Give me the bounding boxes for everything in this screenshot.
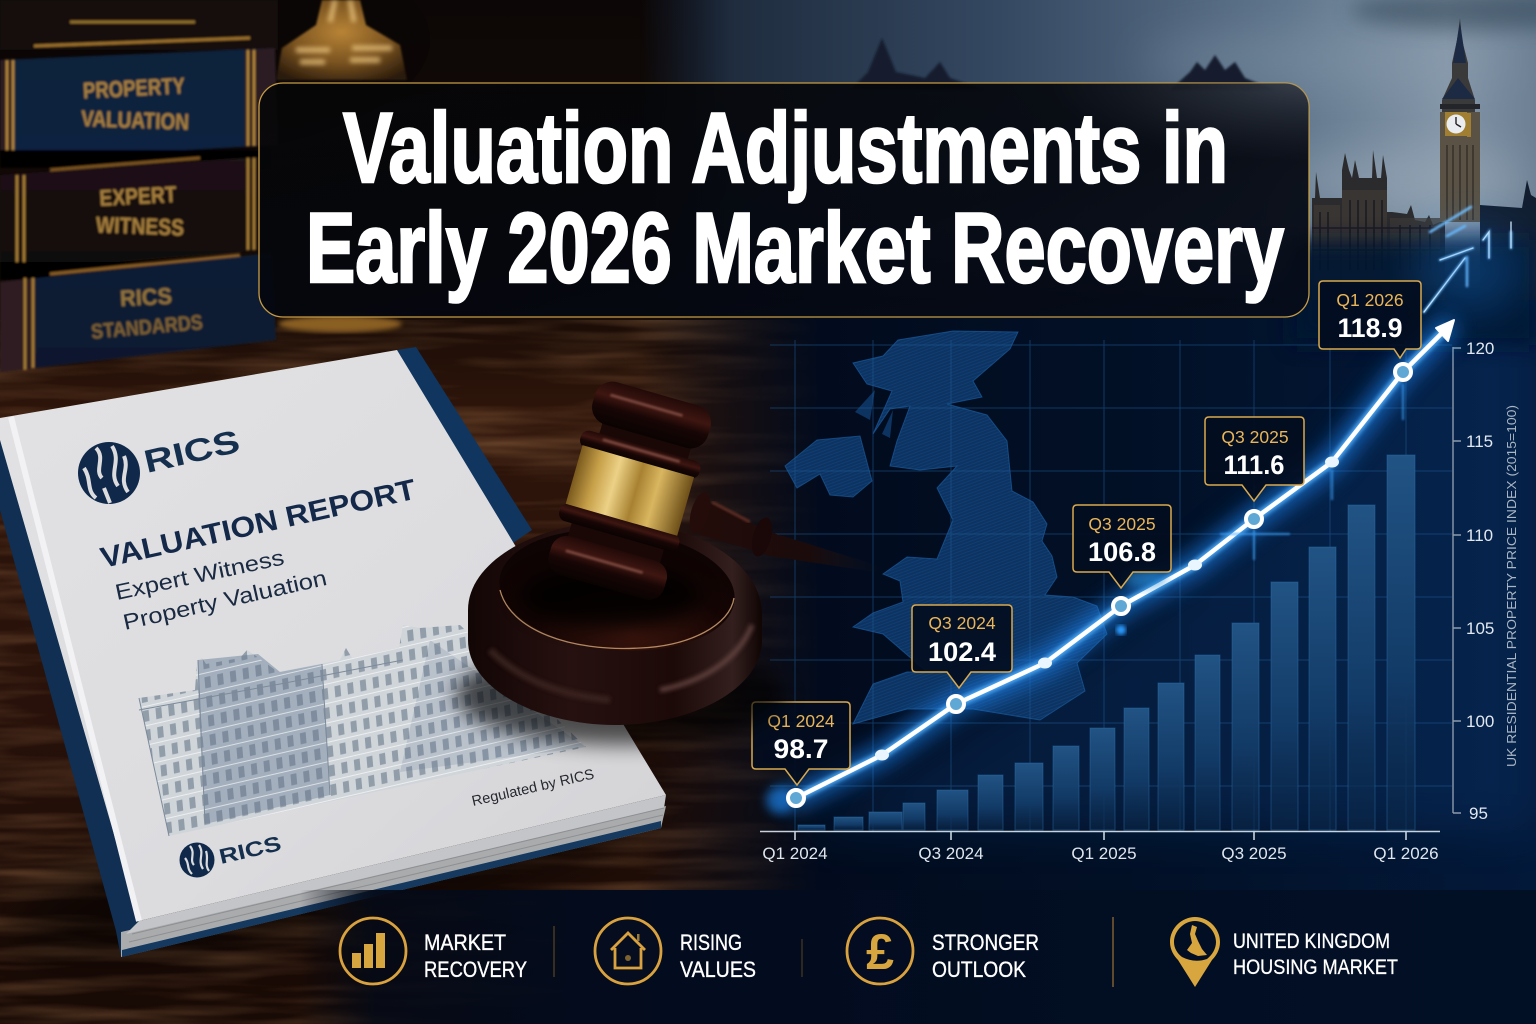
panel: footer strip [300,890,1536,1024]
callout: Q3 2025 106.8: Q3 2025 [1088,514,1156,534]
text: regulated by RICS: Regulated by RICS [470,767,596,810]
panel: valuation report book [0,347,687,1005]
book: Property Valuation: PROPERTY [82,72,186,104]
chart: y axis: 115 [1466,432,1493,451]
text: united kingdom housing market: UNITED KINGDOM [1233,930,1390,953]
callout: Q1 2026 118.9: 118.9 [1338,313,1402,343]
chart: x axis: Q3 2024 [918,844,984,863]
gavel head [543,377,717,604]
Houses of Parliament silhouette [850,38,1536,300]
callout: Q1 2026 118.9 [1319,281,1421,358]
book: Expert Witness: EXPERT [99,181,177,211]
callout: Q3 2024 102.4: 102.4 [928,637,996,667]
callout: Q1 2024 98.7 [752,702,850,785]
callout: Q1 2026 118.9: Q1 2026 [1336,290,1404,310]
report title text: Property Valuation [121,565,329,635]
text: y axis title: UK RESIDENTIAL PROPERTY PRICE INDEX (2015=100) [1505,405,1519,767]
text: stronger outlook [932,930,1039,982]
book: Expert Witness: WITNESS [96,211,184,241]
text: rising values: RISING [680,930,742,955]
chart: data points [766,364,1411,814]
book: RICS Standards [0,253,276,372]
callout: Q3 2025 111.6: Q3 2025 [1221,427,1289,447]
text: stronger outlook: STRONGER [932,930,1039,955]
arrow head [1436,320,1454,341]
logo: RICS bottom: RICS [217,832,284,869]
text: market recovery: MARKET [424,930,506,955]
report title text [98,474,419,635]
callout: Q3 2024 102.4 [912,605,1012,688]
chart: x axis: Q1 2025 [1071,844,1137,863]
background: navy digital panel [640,0,1536,1024]
logo: RICS top [78,423,243,504]
callout: Q1 2024 98.7: Q1 2024 [767,711,835,731]
chart: x axis: Q1 2026 [1373,844,1439,863]
text: market recovery: RECOVERY [424,957,527,982]
illustration: terraced building sketch [139,625,586,836]
callout: Q3 2025 106.8: 106.8 [1088,537,1156,567]
chart: glowing index line [796,320,1454,798]
heading: title line 1: Valuation Adjustments in [343,92,1228,203]
text: market recovery [424,930,527,982]
chart: grid lines [770,340,1452,831]
callout: Q3 2025 106.8 [1073,505,1171,588]
sound block [468,520,762,725]
map: United Kingdom [785,331,1107,724]
stack of law books [0,0,278,372]
callout: Q3 2024 102.4: Q3 2024 [928,613,996,633]
icon: judge gavel and sound block [455,377,883,745]
skyline fade into chart panel [1290,240,1536,345]
report title text: VALUATION REPORT [98,474,419,575]
logo: RICS top: RICS [140,423,243,480]
brass lamp base [276,0,407,332]
callout: Q3 2025 111.6: 111.6 [1224,450,1284,480]
chart: y axis [1453,339,1494,823]
icon: pound sign: £ [866,924,894,980]
chart: y axis: 105 [1466,619,1494,638]
book: RICS Standards: STANDARDS [90,311,204,344]
chart: index bars [798,455,1415,830]
chart: y axis: 110 [1466,526,1493,545]
logo: RICS bottom [180,832,284,878]
book: Property Valuation [0,48,278,160]
chart: y axis: 100 [1466,712,1494,731]
text: rising values: VALUES [680,957,756,982]
icon: blue electric arrows over skyline [1415,207,1525,315]
icon: pound sign [847,918,913,984]
icon: Big Ben clock tower [1440,18,1480,222]
report title text: Expert Witness [113,545,286,605]
book: Expert Witness [0,157,258,272]
gavel handle [686,490,883,572]
text: rising values [680,930,756,982]
text: stronger outlook: OUTLOOK [932,957,1026,982]
icon: house [595,918,661,984]
chart: y axis: 120 [1466,339,1494,358]
text: united kingdom housing market: HOUSING MARKET [1233,956,1398,979]
chart: x axis: Q1 2024 [762,844,828,863]
icon: UK map pin [1170,917,1220,987]
book: RICS Standards: RICS [119,283,173,311]
text: united kingdom housing market [1233,930,1398,979]
callout: Q3 2025 111.6 [1205,417,1304,501]
background: grey London sky [658,0,1536,258]
chart: x axis [760,831,1440,863]
callout: Q1 2024 98.7: 98.7 [774,734,828,764]
chart: x axis: Q3 2025 [1221,844,1287,863]
chart: y axis: 95 [1469,804,1488,823]
book: top unlabelled volume [34,22,250,46]
book: Property Valuation: VALUATION [81,105,189,135]
panel: title banner [259,83,1309,317]
icon: bar chart [340,918,406,984]
